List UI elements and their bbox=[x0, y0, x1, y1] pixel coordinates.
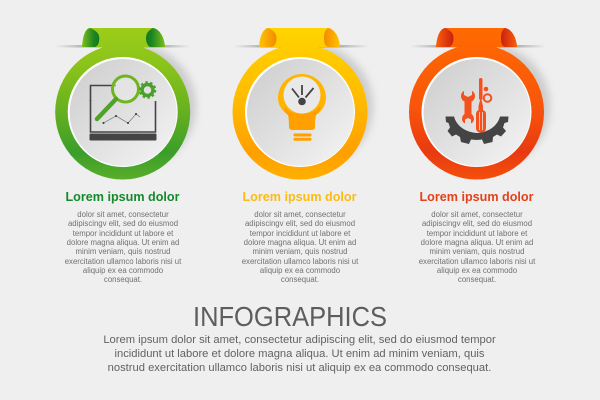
green disc bbox=[68, 57, 178, 167]
text: yellow column: adipiscingv elit, sed do eiusmod bbox=[245, 219, 355, 228]
red disc bbox=[422, 57, 532, 167]
icon: light bulb bbox=[278, 74, 326, 141]
text: red column: dolore magna aliqua. Ut enim ad bbox=[421, 238, 533, 247]
text: red column: dolor sit amet, consectetur bbox=[431, 210, 523, 219]
red ribbon bbox=[436, 28, 517, 47]
description: incididunt ut labore et dolore magna aliqua. Ut enim ad minim veniam, quis bbox=[114, 348, 484, 360]
text: yellow column: aliquip ex ea commodo bbox=[260, 266, 340, 275]
text: green column: aliquip ex ea commodo bbox=[83, 266, 163, 275]
heading: red column: Lorem ipsum dolor bbox=[419, 190, 534, 204]
text: green column: exercitation ullamco laboris nisi ut bbox=[65, 257, 181, 266]
green ring bbox=[55, 44, 190, 180]
description bbox=[103, 334, 496, 374]
text: yellow column: tempor incididunt ut labore et bbox=[250, 229, 350, 238]
yellow disc bbox=[245, 57, 355, 167]
heading: yellow column: Lorem ipsum dolor bbox=[242, 190, 357, 204]
text: yellow column: exercitation ullamco laboris nisi ut bbox=[242, 257, 358, 266]
text: green column: tempor incididunt ut labore et bbox=[73, 229, 173, 238]
text: green column: consequat. bbox=[104, 275, 142, 284]
text: green column: dolore magna aliqua. Ut enim ad bbox=[67, 238, 179, 247]
yellow ring bbox=[232, 44, 368, 180]
green ribbon bbox=[82, 28, 165, 47]
text: green column: adipiscingv elit, sed do eiusmod bbox=[68, 219, 178, 228]
title: INFOGRAPHICS bbox=[193, 301, 387, 332]
text: red column: consequat. bbox=[458, 275, 496, 284]
text: red column: tempor incididunt ut labore et bbox=[427, 229, 527, 238]
text: green column: minim veniam, quis nostrud bbox=[76, 247, 170, 256]
text: yellow column: dolor sit amet, consectetur bbox=[254, 210, 346, 219]
text: red column: aliquip ex ea commodo bbox=[437, 266, 517, 275]
text: yellow column: dolore magna aliqua. Ut enim ad bbox=[244, 238, 356, 247]
text: green column bbox=[65, 210, 182, 284]
text: green column: dolor sit amet, consectetur bbox=[77, 210, 169, 219]
text: red column: minim veniam, quis nostrud bbox=[430, 247, 524, 256]
text: yellow column bbox=[242, 210, 358, 284]
badge: yellow idea bbox=[232, 28, 373, 180]
text: red column bbox=[419, 210, 536, 284]
heading: green column: Lorem ipsum dolor bbox=[65, 190, 180, 204]
description: nostrud exercitation ullamco laboris nisi ut aliquip ex ea commodo consequat. bbox=[108, 362, 491, 374]
text: red column: exercitation ullamco laboris nisi ut bbox=[419, 257, 535, 266]
text: yellow column: minim veniam, quis nostrud bbox=[253, 247, 347, 256]
badge: red tools bbox=[409, 28, 550, 180]
yellow ribbon bbox=[259, 28, 340, 47]
icon: laptop with magnifier and gear bbox=[90, 76, 156, 140]
text: red column: adipiscingv elit, sed do eiusmod bbox=[422, 219, 532, 228]
text: yellow column: consequat. bbox=[281, 275, 319, 284]
badge: green analysis bbox=[55, 28, 196, 180]
red ring bbox=[409, 44, 544, 180]
icon: wrench, screwdriver and gear bbox=[446, 78, 508, 144]
description: Lorem ipsum dolor sit amet, consectetur adipiscing elit, sed do eiusmod tempor bbox=[103, 334, 496, 346]
